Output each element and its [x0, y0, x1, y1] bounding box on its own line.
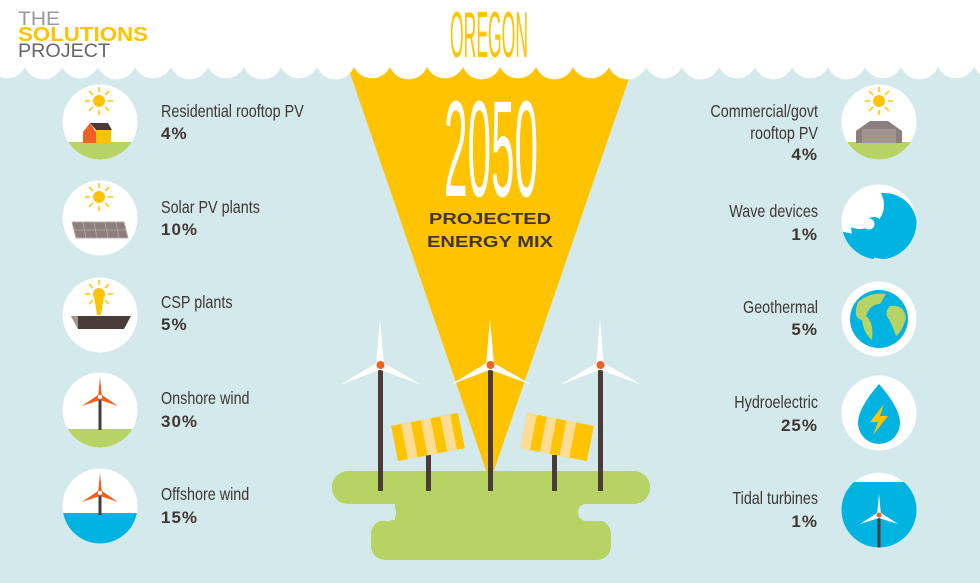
item: tidal turbines: Tidal turbines — [732, 490, 818, 508]
item: hydroelectric: Hydroelectric — [734, 394, 818, 412]
item: commercial/govt rooftop PV: Commercial/govt — [710, 103, 818, 121]
item: commercial/govt rooftop PV: rooftop PV — [750, 125, 818, 143]
item: offshore wind: Offshore wind — [161, 486, 249, 504]
item: onshore wind: 30% — [161, 412, 198, 431]
item: onshore wind — [60, 372, 250, 454]
item: commercial/govt rooftop PV: 4% — [791, 145, 818, 164]
item: wave devices: 1% — [791, 225, 818, 244]
item: offshore wind — [62, 468, 248, 544]
item: residential rooftop PV: Residential rooftop PV — [161, 103, 304, 121]
item: solar PV plants: Solar PV plants — [161, 199, 260, 217]
logo: PROJECT — [18, 41, 110, 62]
item: solar PV plants: 10% — [161, 220, 198, 239]
item: wave devices — [729, 181, 917, 262]
ground — [332, 471, 650, 560]
item: solar PV plants — [62, 180, 260, 256]
item: residential rooftop PV: 4% — [161, 124, 188, 143]
logo — [18, 9, 148, 62]
2050 headline: PROJECTED — [429, 211, 551, 228]
item: wave devices: Wave devices — [729, 203, 818, 221]
2050 headline: 2050 — [444, 73, 538, 226]
item: offshore wind: 15% — [161, 508, 198, 527]
solar panels — [391, 413, 594, 491]
item: CSP plants — [62, 278, 233, 352]
item: tidal turbines — [732, 470, 920, 550]
item: hydroelectric — [734, 376, 916, 450]
item: tidal turbines: 1% — [791, 512, 818, 531]
wind turbines — [340, 319, 642, 491]
item: CSP plants: 5% — [161, 315, 188, 334]
item: residential rooftop PV — [62, 84, 304, 160]
item: geothermal — [743, 282, 916, 356]
item: hydroelectric: 25% — [781, 416, 818, 435]
item: geothermal: Geothermal — [743, 299, 818, 317]
title: OREGON: OREGON — [450, 0, 528, 72]
logo: THE — [18, 9, 60, 30]
2050 headline — [427, 73, 553, 251]
item: geothermal: 5% — [791, 320, 818, 339]
yellow beam — [325, 0, 656, 482]
header scalloped band — [0, 0, 980, 79]
item: CSP plants: CSP plants — [161, 294, 233, 312]
item: onshore wind: Onshore wind — [161, 390, 250, 408]
logo: SOLUTIONS — [18, 24, 148, 46]
item: commercial/govt rooftop PV — [711, 84, 916, 160]
2050 headline: ENERGY MIX — [427, 234, 553, 251]
